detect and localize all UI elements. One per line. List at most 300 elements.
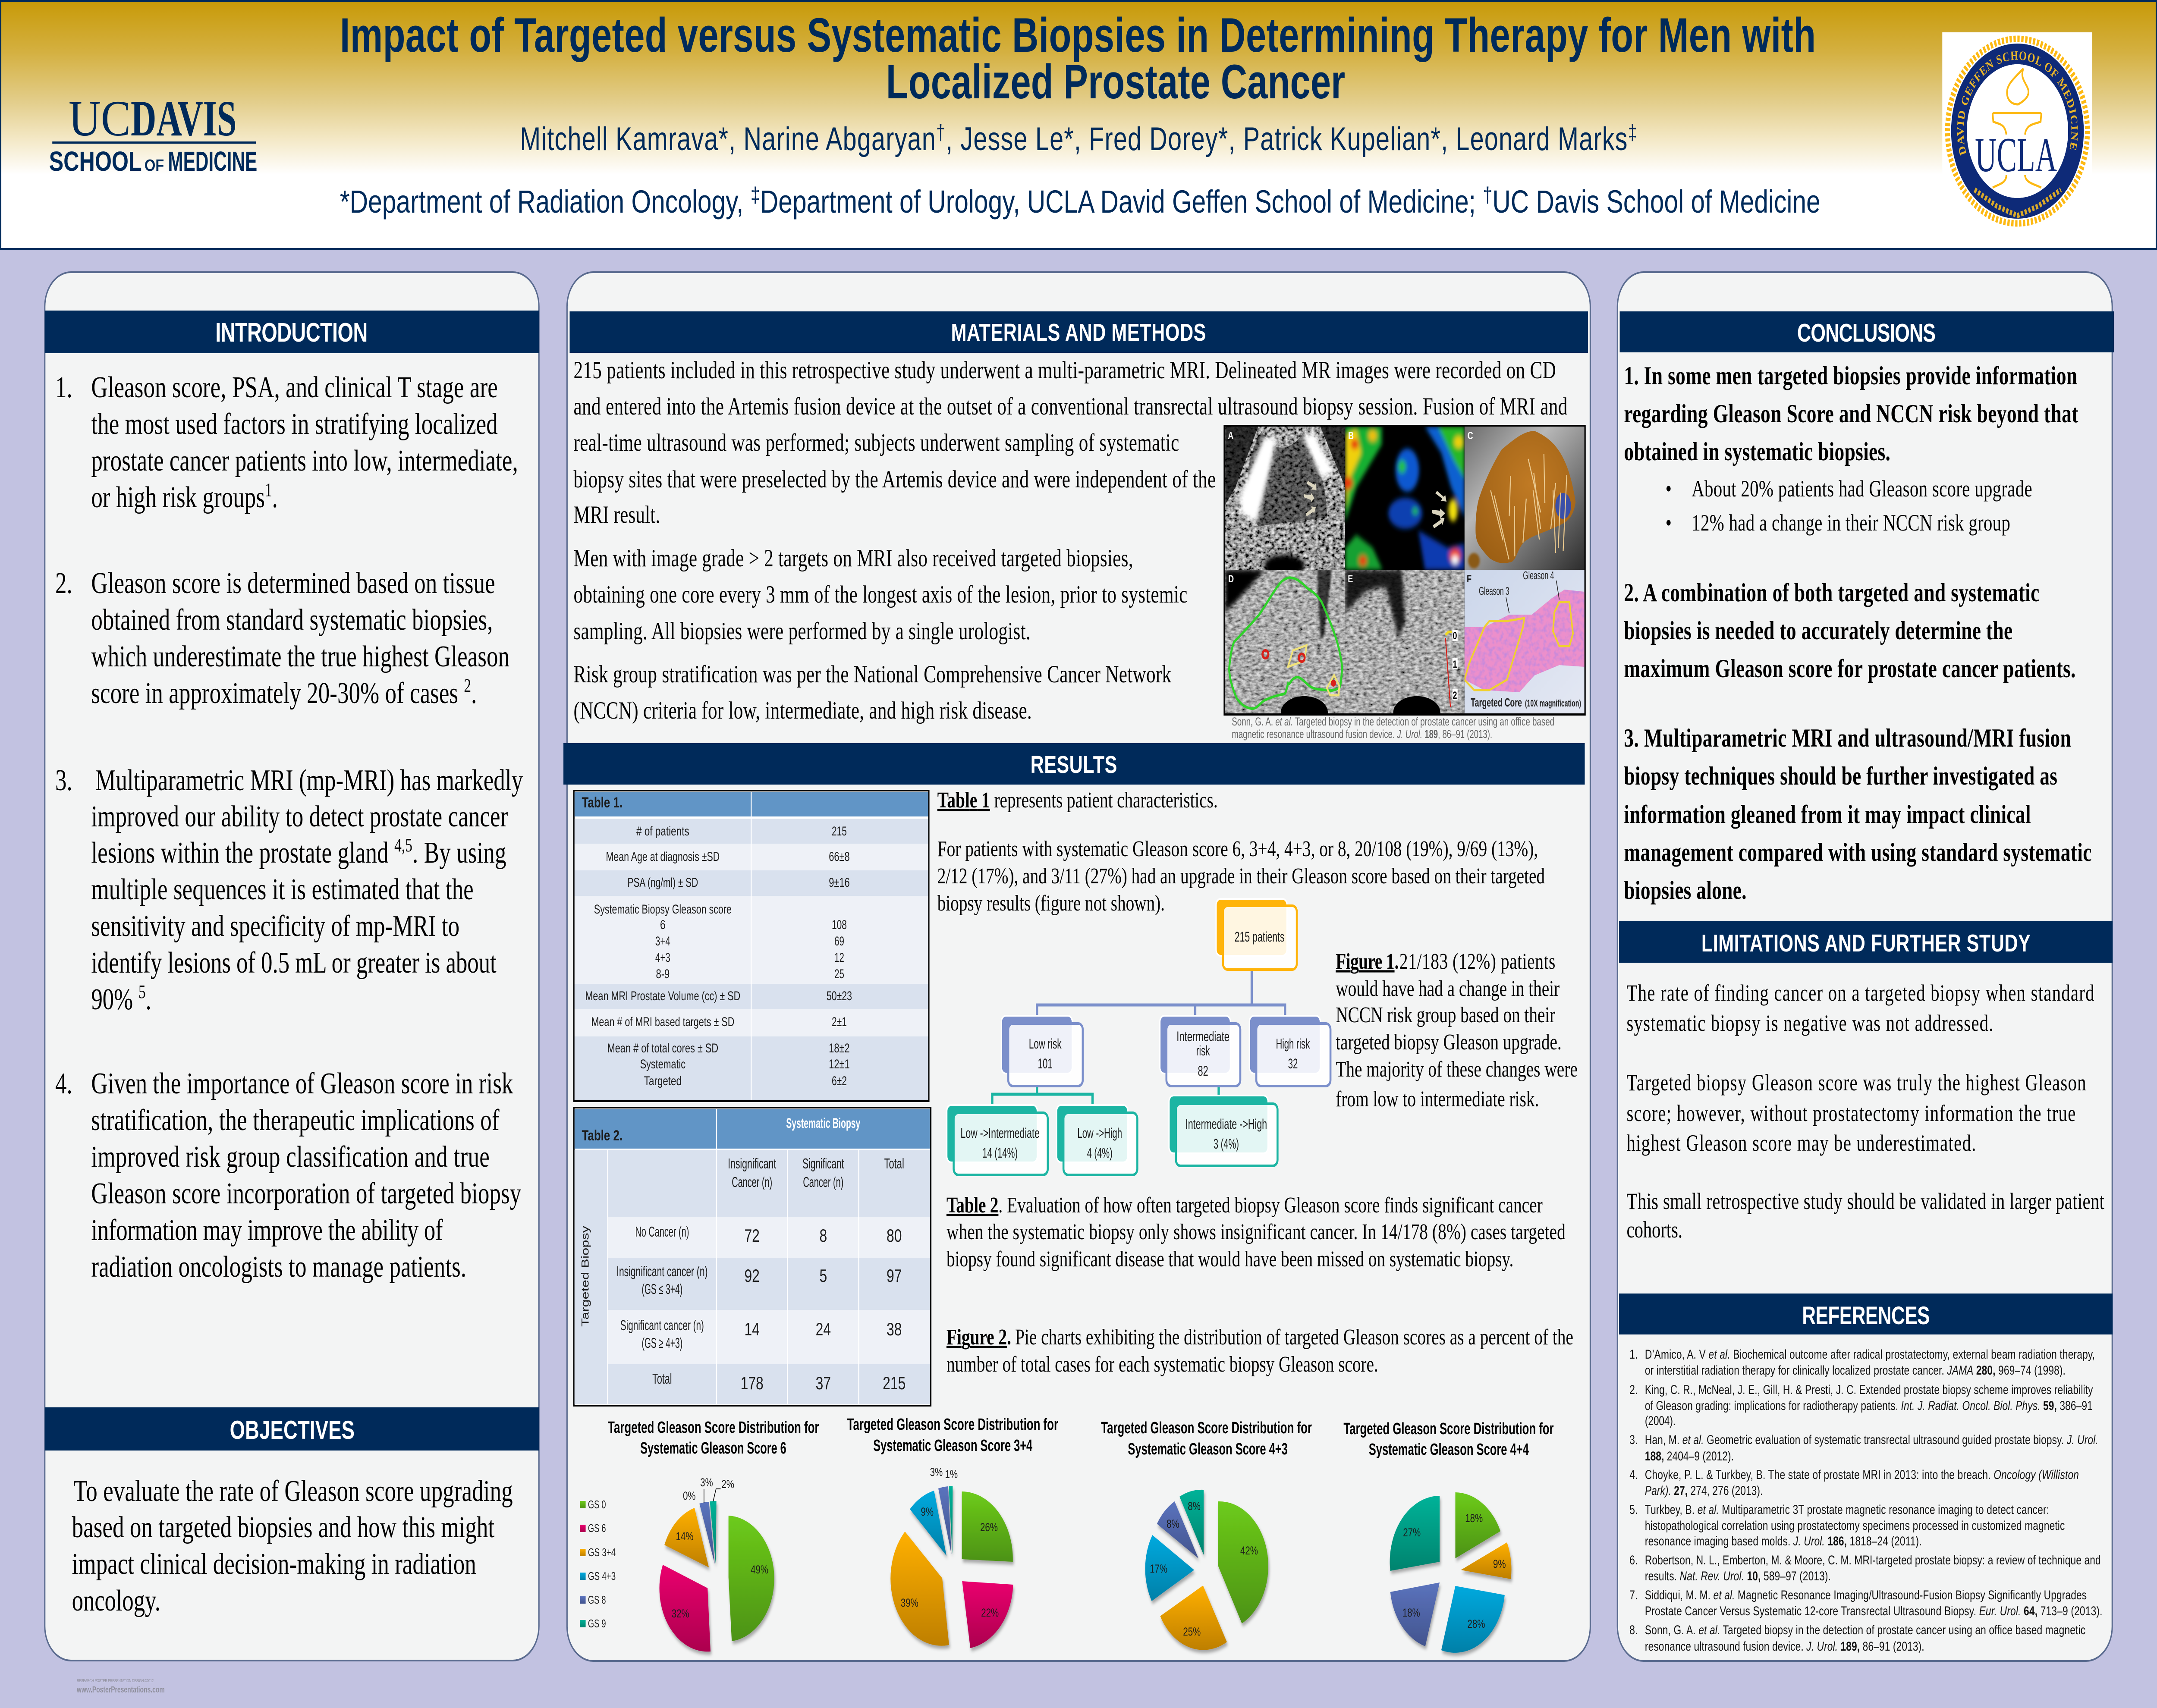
text: figure 2 caption: number of total cases for each systematic biopsy Gleason score.	[946, 1352, 1378, 1376]
node: high risk	[1249, 1016, 1330, 1086]
text: conclusions: obtained in systematic biopsies.	[1624, 437, 1890, 466]
panel letters A-F: D	[1228, 573, 1234, 585]
table 2: targeted vs systematic biopsy: 72	[744, 1225, 760, 1246]
text: reference list: results. Nat. Rev. Urol. 10, 589–97 (2013).	[1645, 1569, 1831, 1583]
logo: UC Davis School of Medicine	[49, 90, 257, 177]
text: reference list: D’Amico, A. V et al. Biochemical outcome after radical prostatectomy, external beam radiation therapy,	[1645, 1347, 2095, 1362]
table 2: targeted vs systematic biopsy: Total	[884, 1156, 904, 1172]
table 1: patient characteristics: 50±23	[827, 989, 852, 1003]
text: figure 1 caption: targeted biopsy Gleason upgrade.	[1336, 1030, 1562, 1054]
text: table 2 caption: Table 2	[946, 1193, 998, 1217]
text: reference list: 6.	[1629, 1553, 1638, 1567]
table 2: targeted vs systematic biopsy: 80	[887, 1225, 902, 1246]
heading: introduction: INTRODUCTION	[215, 317, 368, 348]
heading: results	[563, 743, 1585, 785]
legend: Gleason score colours: GS 6	[588, 1522, 606, 1535]
pie chart: systematic Gleason score 3+4: 1%	[945, 1468, 958, 1481]
heading: materials and methods: MATERIALS AND METHODS	[951, 318, 1206, 346]
table 2: targeted vs systematic biopsy: 5	[819, 1265, 827, 1286]
table 2: targeted vs systematic biopsy: Significant cancer (n)	[620, 1318, 704, 1334]
authors: Mitchell Kamrava*, Narine Abgaryan	[520, 121, 936, 157]
figure caption: magnetic resonance ultrasound fusion device. J. Urol. 189, 86–91 (2013).	[1232, 728, 1492, 741]
text: figure 2 caption: Pie charts exhibiting the distribution of targeted Gleason scores as a percent of the	[1015, 1325, 1573, 1349]
table 2: targeted vs systematic biopsy: Table 2.	[582, 1128, 623, 1144]
panel letters A-F: C	[1468, 430, 1473, 442]
table 2: targeted vs systematic biopsy: No Cancer (n)	[635, 1224, 689, 1240]
text: introduction list: Given the importance of Gleason score in risk	[91, 1067, 513, 1100]
text: limitations: Targeted biopsy Gleason score was truly the highest Gleason	[1626, 1070, 2086, 1096]
text: objectives: based on targeted biopsies and how this might	[72, 1511, 494, 1544]
text: reference list: 7.	[1629, 1588, 1638, 1602]
text: introduction list: .	[145, 983, 151, 1016]
text: introduction list: .	[471, 677, 477, 710]
text: figure 1 caption: NCCN risk group based on their	[1336, 1002, 1555, 1027]
image F: histology core: (10X magnification)	[1525, 698, 1581, 709]
panel letters A-F	[1228, 430, 1473, 585]
text: reference list: Choyke, P. L. & Turkbey, B. The state of prostate MRI in 2013: into the breach. Oncology (Williston	[1645, 1467, 2079, 1482]
text: methods: real-time ultrasound was performed; subjects underwent sampling of systematic	[574, 429, 1179, 456]
text: introduction list: 4,5	[394, 835, 412, 856]
text: figure 1 caption: would have had a change in their	[1336, 976, 1560, 1001]
table 1: patient characteristics: Mean MRI Prostate Volume (cc) ± SD	[585, 989, 740, 1003]
text: methods: biopsy sites that were preselected by the Artemis device and were independent of the	[574, 465, 1216, 493]
panel letters A-F: E	[1348, 573, 1353, 585]
pie chart: systematic Gleason score 4+3	[1101, 1419, 1312, 1650]
text: figure 1 caption: The majority of these changes were	[1336, 1057, 1578, 1081]
node: intermediate risk: Intermediate	[1176, 1029, 1229, 1045]
pie chart: systematic Gleason score 6: 14%	[676, 1530, 694, 1543]
image E: ultrasound with needle track: 1	[1453, 659, 1457, 670]
node: low to intermediate: Low ->Intermediate	[961, 1126, 1040, 1141]
node: high risk: High risk	[1276, 1036, 1310, 1052]
table 1: patient characteristics: Mean Age at diagnosis ±SD	[606, 849, 720, 864]
image E: ultrasound with needle track	[1345, 570, 1465, 713]
text: introduction list: 5	[138, 982, 146, 1002]
node: intermediate to high: 3 (4%)	[1214, 1137, 1239, 1152]
text: objectives: oncology.	[72, 1584, 160, 1617]
table 1: patient characteristics: PSA (ng/ml) ± SD	[628, 875, 698, 890]
text: reference list: Turkbey, B. et al. Multiparametric 3T prostate magnetic resonance imaging to detect cancer:	[1645, 1502, 2049, 1517]
text: methods: MRI result.	[574, 501, 660, 528]
image F: histology core: Gleason 3	[1479, 584, 1509, 597]
text: conclusions: 3. Multiparametric MRI and ultrasound/MRI fusion	[1624, 724, 2071, 753]
table 1: patient characteristics: Systematic	[640, 1057, 685, 1071]
title: Impact of Targeted versus Systematic Biopsies in Determining Therapy for Men with	[340, 9, 1816, 63]
table 2: targeted vs systematic biopsy: 37	[816, 1373, 831, 1393]
text: conclusions: 2. A combination of both targeted and systematic	[1624, 578, 2039, 607]
text: reference list: or interstitial radiation therapy for clinically localized prostate cancer. JAMA 280, 969–74 (1998).	[1645, 1363, 2066, 1378]
text: limitations	[1626, 980, 2105, 1243]
pie chart: systematic Gleason score 4+3: 42%	[1240, 1544, 1258, 1557]
pie chart: systematic Gleason score 4+3: 8%	[1167, 1517, 1179, 1531]
text: reference list: Sonn, G. A. et al. Targeted biopsy in the detection of prostate cancer using an office based magnetic	[1645, 1623, 2085, 1637]
text: reference list: of Gleason grading: implications for radiotherapy patients. Int. J. Radiat. Oncol. Biol. Phys. 59, 386–91	[1645, 1398, 2093, 1413]
pie chart: systematic Gleason score 6: Targeted Gleason Score Distribution for	[608, 1418, 819, 1437]
legend: Gleason score colours: GS 8	[588, 1593, 606, 1606]
text: methods: obtaining one core every 3 mm of the longest axis of the lesion, prior to systemic	[574, 581, 1187, 608]
text: table 1 description and upgrade rates: biopsy results (figure not shown).	[937, 891, 1165, 915]
logo: UCLA David Geffen School of Medicine seal: DAVID GEFFEN SCHOOL OF MEDICINE	[1955, 48, 2080, 157]
node: intermediate risk: 82	[1198, 1064, 1208, 1079]
text: introduction list: 90%	[91, 983, 133, 1016]
table 1: patient characteristics	[574, 791, 929, 1101]
text: methods: and entered into the Artemis fusion device at the outset of a conventional transrectal ultrasound biopsy session. Fusion of MRI and	[574, 392, 1567, 420]
text: table 1 description and upgrade rates: represents patient characteristics.	[994, 788, 1218, 812]
legend: Gleason score colours: GS 9	[588, 1617, 606, 1630]
text: methods	[574, 356, 1567, 724]
text: reference list: Park). 27, 274, 276 (2013).	[1645, 1483, 1763, 1498]
text: objectives: To evaluate the rate of Gleason score upgrading	[73, 1475, 513, 1508]
legend: Gleason score colours: GS 4+3	[588, 1570, 616, 1582]
heading: introduction	[45, 311, 539, 353]
text: introduction list: 1.	[55, 371, 72, 404]
text: introduction list: sensitivity and specificity of mp-MRI to	[91, 910, 459, 943]
text: reference list: 2.	[1629, 1382, 1638, 1397]
text: introduction list: 2	[464, 675, 471, 696]
text: figure 1 caption: 21/183 (12%) patients	[1399, 949, 1555, 973]
table 2: targeted vs systematic biopsy: 97	[887, 1265, 902, 1286]
footer credit	[76, 1678, 165, 1695]
node: low to high	[1056, 1105, 1137, 1175]
text: introduction list: 1	[265, 480, 272, 500]
table 1: patient characteristics: 25	[834, 967, 844, 981]
affiliations: †	[1483, 183, 1492, 207]
pie chart: systematic Gleason score 4+3: 25%	[1183, 1625, 1201, 1639]
table 1: patient characteristics: # of patients	[636, 824, 689, 838]
text: figure 2 caption: Figure 2	[946, 1325, 1007, 1349]
text: introduction list: information may improve the ability of	[91, 1214, 443, 1247]
text: introduction list: lesions within the prostate gland	[91, 836, 389, 870]
logo: UC Davis School of Medicine: SCHOOL	[49, 147, 142, 177]
authors: , Jesse Le*, Fred Dorey*, Patrick Kupelian*, Leonard Marks	[946, 121, 1627, 157]
heading: references: REFERENCES	[1802, 1301, 1930, 1329]
text: table 2 caption: when the systematic biopsy only shows insignificant cancer. In 14/178 (8%) cases targeted	[946, 1219, 1566, 1244]
text: limitations: This small retrospective study should be validated in larger patient	[1626, 1189, 2105, 1214]
pie chart: systematic Gleason score 4+4: Targeted Gleason Score Distribution for	[1343, 1419, 1554, 1438]
node: low risk: Low risk	[1029, 1036, 1062, 1052]
pie chart: systematic Gleason score 4+3: 8%	[1188, 1500, 1201, 1513]
table 2: targeted vs systematic biopsy: (GS ≥ 4+3)	[642, 1336, 682, 1351]
text: introduction list: improved our ability to detect prostate cancer	[91, 800, 508, 833]
node: low risk: 101	[1038, 1056, 1053, 1072]
logo: UC Davis School of Medicine: OF	[145, 156, 164, 175]
pie chart: systematic Gleason score 4+3: Targeted Gleason Score Distribution for	[1101, 1419, 1312, 1437]
table 1: patient characteristics: 12	[834, 950, 844, 965]
text: reference list: 8.	[1629, 1623, 1638, 1637]
image A: T2 MRI	[1225, 427, 1345, 577]
text: introduction list: Gleason score incorporation of targeted biopsy	[91, 1177, 521, 1210]
table 2: targeted vs systematic biopsy: 14	[744, 1319, 760, 1339]
text: table 2 caption: . Evaluation of how often targeted biopsy Gleason score finds significant cancer	[998, 1193, 1543, 1217]
text: introduction list: stratification, the therapeutic implications of	[91, 1104, 500, 1137]
pie chart: systematic Gleason score 3+4: 3%	[930, 1466, 943, 1479]
pie chart: systematic Gleason score 6: 2%	[721, 1478, 734, 1491]
text: reference list: Prostate Cancer Versus Systematic 12-core Transrectal Ultrasound Biopsy. Eur. Urol. 64, 713–9 (2013).	[1645, 1604, 2102, 1618]
text: reference list: 4.	[1629, 1467, 1638, 1482]
chart: risk group flow diagram	[947, 899, 1330, 1175]
text: reference list: Robertson, N. L., Emberton, M. & Moore, C. M. MRI-targeted prostate biopsy: a review of technique and	[1645, 1553, 2101, 1567]
table 1: patient characteristics: Targeted	[644, 1074, 682, 1088]
text: figure 1 caption: from low to intermediate risk.	[1336, 1086, 1539, 1111]
panel letters A-F: A	[1228, 430, 1233, 442]
pie chart: systematic Gleason score 4+3: Systematic Gleason Score 4+3	[1128, 1440, 1288, 1458]
pie chart: systematic Gleason score 3+4: 39%	[901, 1596, 918, 1610]
text: reference list: King, C. R., McNeal, J. E., Gill, H. & Presti, J. C. Extended prostate biopsy scheme improves reliability	[1645, 1382, 2093, 1397]
text: introduction list: or high risk groups	[91, 481, 265, 514]
table 2: targeted vs systematic biopsy: 92	[744, 1265, 760, 1286]
figure: MRI, ultrasound and histology image grid	[1224, 426, 1585, 734]
logo: UC Davis School of Medicine: DAVIS	[131, 90, 236, 147]
footer credit: RESEARCH POSTER PRESENTATION DESIGN ©2012	[77, 1678, 154, 1683]
panel letters A-F: B	[1348, 430, 1354, 442]
text: introduction list: Gleason score, PSA, and clinical T stage are	[91, 371, 498, 404]
text: introduction list: .	[272, 481, 278, 514]
pie chart: systematic Gleason score 6	[608, 1418, 819, 1651]
pie chart: systematic Gleason score 4+4	[1343, 1419, 1554, 1653]
text: methods: 215 patients included in this retrospective study underwent a multi-parametric MRI. Delineated MR images were recorded on CD	[574, 356, 1556, 383]
node: 215 patients: 215 patients	[1235, 929, 1285, 945]
heading: limitations and further study	[1619, 921, 2113, 963]
text: reference list: Han, M. et al. Geometric evaluation of systematic transrectal ultrasound guided prostate biopsy. J. Urol.	[1645, 1432, 2098, 1447]
connectors	[1037, 970, 1285, 1016]
text: figure 1 caption: .	[1395, 949, 1399, 973]
table 2: targeted vs systematic biopsy	[574, 1108, 931, 1406]
affiliations: UC Davis School of Medicine	[1492, 184, 1821, 220]
image F: histology core	[1465, 569, 1585, 713]
authors: ‡	[1628, 121, 1637, 144]
text: introduction list: score in approximately 20-30% of cases	[91, 677, 458, 710]
heading: results: RESULTS	[1031, 750, 1117, 778]
text: conclusions: regarding Gleason Score and NCCN risk beyond that	[1624, 399, 2078, 428]
pie chart: systematic Gleason score 3+4	[847, 1415, 1058, 1648]
table 2: targeted vs systematic biopsy: 178	[741, 1373, 764, 1393]
table 2: targeted vs systematic biopsy: Insignificant cancer (n)	[616, 1264, 708, 1280]
text: reference list: (2004).	[1645, 1413, 1676, 1428]
text: introduction list: the most used factors in stratifying localized	[91, 408, 498, 441]
table 1: patient characteristics: 3+4	[655, 934, 670, 948]
table 1: patient characteristics: 66±8	[829, 849, 850, 864]
affiliations: *Department of Radiation Oncology,	[340, 184, 725, 220]
text: limitations: score; however, without prostatectomy information the true	[1626, 1101, 2075, 1126]
table 2: targeted vs systematic biopsy: Systematic Biopsy	[786, 1116, 860, 1131]
heading: materials and methods	[569, 311, 1588, 353]
table 2: targeted vs systematic biopsy: (GS ≤ 3+4)	[642, 1282, 682, 1297]
image E: ultrasound with needle track: 2	[1453, 690, 1457, 701]
node: high risk: 32	[1288, 1056, 1298, 1072]
image B: colour perfusion map	[1343, 427, 1465, 570]
table 2: targeted vs systematic biopsy: Significant	[802, 1156, 844, 1172]
text: introduction list: which underestimate the true highest Gleason	[91, 640, 509, 673]
text: table 1 description and upgrade rates: For patients with systematic Gleason score 6, 3+4, 4+3, or 8, 20/108 (19%), 9/69 (13%),	[937, 836, 1538, 861]
table 1: patient characteristics: 6±2	[832, 1074, 847, 1088]
text: conclusions: maximum Gleason score for prostate cancer patients.	[1624, 654, 2075, 683]
logo: UC Davis School of Medicine: UC	[69, 90, 131, 147]
table 1: patient characteristics: 8-9	[656, 967, 670, 981]
text: table 1 description and upgrade rates: Table 1	[937, 788, 990, 812]
text: introduction list	[55, 371, 523, 1284]
pie chart: systematic Gleason score 4+4: 9%	[1493, 1557, 1506, 1571]
text: limitations: highest Gleason score may be underestimated.	[1626, 1130, 1976, 1156]
panel letters A-F: F	[1467, 573, 1472, 585]
text: conclusions: 12% had a change in their NCCN risk group	[1692, 510, 2010, 536]
text: introduction list: . By using	[412, 836, 506, 870]
heading: references	[1619, 1294, 2113, 1334]
table 2: targeted vs systematic biopsy: Cancer (n)	[732, 1175, 772, 1190]
text: reference list: 188, 2404–9 (2012).	[1645, 1449, 1734, 1463]
legend: Gleason score colours: GS 0	[588, 1498, 606, 1511]
pie chart: systematic Gleason score 3+4: Targeted Gleason Score Distribution for	[847, 1415, 1058, 1434]
panel: right column	[1617, 272, 2114, 1661]
text: table 1 description and upgrade rates	[937, 788, 1545, 915]
text: objectives: impact clinical decision-making in radiation	[72, 1548, 476, 1581]
text: conclusions: information gleaned from it may impact clinical	[1624, 800, 2031, 829]
text: conclusions: •	[1666, 476, 1672, 502]
node: low to high: 4 (4%)	[1087, 1146, 1113, 1161]
heading: limitations and further study: LIMITATIONS AND FURTHER STUDY	[1701, 929, 2031, 957]
image F: histology core: Gleason 4	[1523, 569, 1554, 582]
table 2: targeted vs systematic biopsy: 215	[883, 1373, 906, 1393]
text: figure 2 caption	[946, 1325, 1573, 1376]
text: introduction list: 3.	[55, 764, 72, 797]
image C: 3D prostate model with needle tracks	[1465, 427, 1585, 570]
table 1: patient characteristics: 215	[832, 824, 847, 838]
pie chart: systematic Gleason score 6: 3%	[700, 1476, 713, 1489]
figure caption	[1232, 715, 1554, 741]
text: conclusions: 1. In some men targeted biopsies provide information	[1624, 361, 2077, 390]
text: conclusions: About 20% patients had Gleason score upgrade	[1692, 476, 2032, 502]
logo: UC Davis School of Medicine: MEDICINE	[168, 147, 257, 177]
heading: conclusions	[1620, 311, 2114, 352]
table 2: targeted vs systematic biopsy: Total	[652, 1372, 672, 1387]
title	[340, 9, 1816, 109]
text: conclusions: biopsies is needed to accurately determine the	[1624, 616, 2012, 645]
table 2: targeted vs systematic biopsy: Cancer (n)	[803, 1175, 843, 1190]
node: low to intermediate: 14 (14%)	[982, 1146, 1018, 1161]
header band	[1, 1, 2156, 249]
text: introduction list: obtained from standard systematic biopsies,	[91, 603, 493, 637]
text: reference list: histopathological correlation using prostatectomy specimens processed in customized magnetic	[1645, 1518, 2065, 1533]
affiliations: ‡	[751, 183, 760, 207]
text: introduction list: Multiparametric MRI (mp-MRI) has markedly	[95, 764, 523, 797]
text: limitations: cohorts.	[1626, 1217, 1682, 1243]
text: reference list: resonance ultrasound fusion device. J. Urol. 189, 86–91 (2013).	[1645, 1639, 1924, 1654]
heading: objectives: OBJECTIVES	[230, 1416, 355, 1445]
table 1: patient characteristics: 108	[832, 917, 847, 932]
table 1: patient characteristics: Table 1.	[582, 795, 623, 811]
text: reference list: Siddiqui, M. M. et al. Magnetic Resonance Imaging/Ultrasound-Fusion Biopsy Significantly Upgrades	[1645, 1588, 2087, 1602]
table 2: targeted vs systematic biopsy: 24	[816, 1319, 831, 1339]
text: conclusions	[1624, 361, 2091, 905]
table 1: patient characteristics: 69	[834, 934, 844, 948]
pie chart: systematic Gleason score 3+4: 26%	[980, 1521, 998, 1534]
table 2: targeted vs systematic biopsy: 38	[887, 1319, 902, 1339]
text: conclusions: •	[1666, 510, 1672, 536]
text: limitations: systematic biopsy is negative was not addressed.	[1626, 1011, 1993, 1036]
table 1: patient characteristics: 12±1	[829, 1057, 850, 1071]
text: table 2 caption: biopsy found significant disease that would have been missed on systematic biopsy.	[946, 1246, 1513, 1271]
text: reference list: 1.	[1629, 1347, 1638, 1362]
table 2: targeted vs systematic biopsy: Insignificant	[728, 1156, 776, 1172]
text: conclusions: biopsies alone.	[1624, 876, 1746, 905]
text: methods: Men with image grade > 2 targets on MRI also received targeted biopsies,	[574, 544, 1133, 571]
node: low risk	[1001, 1016, 1083, 1086]
panel: left column	[45, 272, 539, 1661]
text: limitations: The rate of finding cancer on a targeted biopsy when standard	[1626, 980, 2094, 1006]
table 1: patient characteristics: 4+3	[655, 950, 670, 965]
pie chart: systematic Gleason score 6: 0%	[683, 1489, 696, 1503]
pie chart: systematic Gleason score 4+4: Systematic Gleason Score 4+4	[1369, 1440, 1529, 1459]
table 2: targeted vs systematic biopsy: Targeted Biopsy	[579, 1225, 591, 1327]
heading: conclusions: CONCLUSIONS	[1797, 319, 1936, 348]
node: 215 patients	[1216, 899, 1297, 970]
pie chart: systematic Gleason score 6: 32%	[672, 1607, 689, 1620]
text: reference list: 5.	[1629, 1502, 1638, 1517]
table 1: patient characteristics: 2±1	[832, 1014, 847, 1029]
text: reference list: resonance imaging based molds. J. Urol. 186, 1818–24 (2011).	[1645, 1534, 1922, 1548]
pie chart: systematic Gleason score 3+4: 22%	[981, 1606, 999, 1620]
text: figure 1 caption	[1336, 949, 1578, 1111]
footer credit: www.PosterPresentations.com	[76, 1685, 165, 1695]
pie chart: systematic Gleason score 3+4: Systematic Gleason Score 3+4	[873, 1436, 1032, 1455]
text: methods: sampling. All biopsies were performed by a single urologist.	[574, 617, 1031, 644]
node: low to high: Low ->High	[1077, 1126, 1122, 1141]
panel: center column	[563, 272, 1590, 1661]
legend: Gleason score colours: GS 3+4	[588, 1546, 616, 1559]
pie chart: systematic Gleason score 6: Systematic Gleason Score 6	[640, 1439, 786, 1457]
heading: objectives	[45, 1407, 539, 1451]
text: figure 2 caption: .	[1007, 1325, 1011, 1349]
text: objectives	[72, 1475, 513, 1617]
pie chart: systematic Gleason score 4+4: 27%	[1403, 1526, 1421, 1539]
authors: †	[936, 121, 945, 144]
text: table 1 description and upgrade rates: 2/12 (17%), and 3/11 (27%) had an upgrade in their Gleason score based on their targeted	[937, 863, 1545, 888]
legend: Gleason score colours	[580, 1498, 616, 1630]
text: introduction list: 4.	[55, 1067, 72, 1100]
text: methods: Risk group stratification was per the National Comprehensive Cancer Network	[574, 660, 1172, 688]
image E: ultrasound with needle track: 0	[1453, 630, 1457, 642]
text: introduction list: improved risk group classification and true	[91, 1140, 490, 1174]
text: figure 1 caption: Figure 1	[1336, 949, 1395, 973]
node: intermediate to high	[1169, 1096, 1277, 1166]
table 1: patient characteristics: 6	[660, 917, 666, 932]
table 1: patient characteristics: Mean # of MRI based targets ± SD	[591, 1014, 734, 1029]
text: introduction list: 2.	[55, 567, 72, 600]
pie chart: systematic Gleason score 4+4: 18%	[1465, 1512, 1483, 1525]
table 2: targeted vs systematic biopsy: 8	[819, 1225, 827, 1246]
pie chart: systematic Gleason score 4+3: 17%	[1150, 1562, 1167, 1576]
text: methods: (NCCN) criteria for low, intermediate, and high risk disease.	[574, 697, 1032, 724]
title: Localized Prostate Cancer	[886, 55, 1345, 109]
node: intermediate risk	[1160, 1016, 1240, 1086]
text: conclusions: management compared with using standard systematic	[1624, 838, 2091, 867]
affiliations: Department of Urology, UCLA David Geffen School of Medicine;	[760, 184, 1483, 220]
pie chart: systematic Gleason score 6: 49%	[751, 1563, 768, 1576]
text: reference list	[1629, 1347, 2102, 1654]
image D: ultrasound with prostate contour	[1225, 570, 1345, 713]
logo: UCLA David Geffen School of Medicine seal	[1942, 32, 2092, 223]
text: reference list: 3.	[1629, 1432, 1638, 1447]
node: low to intermediate	[947, 1105, 1048, 1175]
text: conclusions: biopsy techniques should be further investigated as	[1624, 762, 2057, 791]
text: introduction list: multiple sequences it is estimated that the	[91, 873, 474, 906]
pie chart: systematic Gleason score 3+4: 9%	[921, 1505, 934, 1519]
logo: UCLA David Geffen School of Medicine seal: UCLA	[1975, 128, 2057, 182]
pie chart: systematic Gleason score 4+4: 18%	[1402, 1606, 1420, 1620]
table 1: patient characteristics: Systematic Biopsy Gleason score	[594, 902, 732, 917]
table 1: patient characteristics: Mean # of total cores ± SD	[607, 1041, 718, 1055]
table 1: patient characteristics: 18±2	[829, 1041, 850, 1055]
node: intermediate risk: risk	[1196, 1043, 1210, 1059]
